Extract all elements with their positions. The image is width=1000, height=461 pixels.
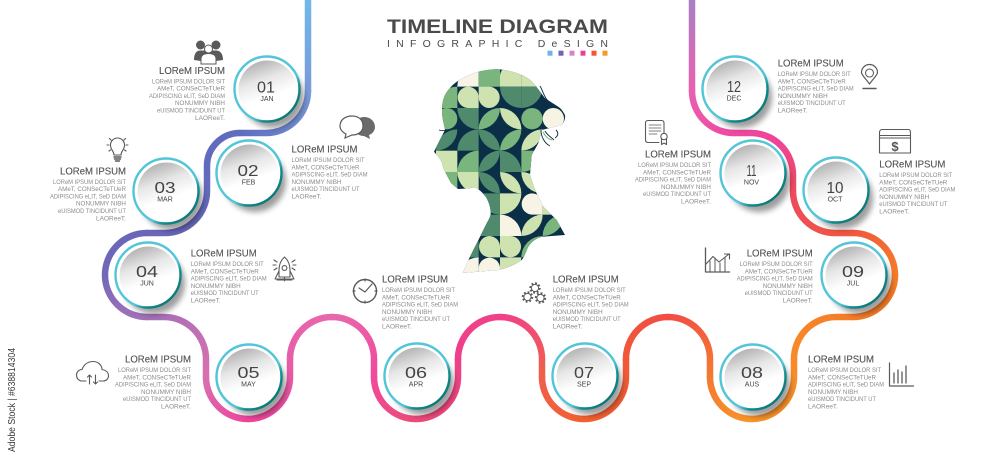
text block 08: AMeT, CONSeCTeTUeR xyxy=(808,374,876,381)
text block 04: eUISMOD TINCIDUNT UT xyxy=(191,290,259,297)
milestone 04: 04 xyxy=(136,264,158,281)
text block 10: eUISMOD TINCIDUNT UT xyxy=(879,201,947,208)
icon: growth chart xyxy=(706,248,730,272)
text block 08: LAOReeT. xyxy=(808,404,838,411)
milestone 12: DEC xyxy=(727,96,741,102)
text block 09: ADIPISCING eLIT, SeD DIAM xyxy=(737,276,813,283)
icon: gears xyxy=(523,283,545,303)
text block 05: NONUMMY NIBH xyxy=(141,389,191,396)
text block 03: eUISMOD TINCIDUNT UT xyxy=(58,208,126,215)
icon: location pin xyxy=(862,64,878,88)
milestone 12 xyxy=(702,56,772,128)
text block 06: eUISMOD TINCIDUNT UT xyxy=(382,316,450,323)
text block 10: ADIPISCING eLIT, SeD DIAM xyxy=(879,187,955,194)
text block 09 xyxy=(737,249,813,304)
text block 02: ADIPISCING eLIT, SeD DIAM xyxy=(292,172,368,179)
text block 05 xyxy=(115,355,191,410)
text block 07: ADIPISCING eLIT, SeD DIAM xyxy=(553,302,629,309)
icon: cloud xyxy=(76,362,108,384)
text block 01: LOReM IPSUM DOLOR SIT xyxy=(152,78,225,85)
text block 07: LOReM IPSUM xyxy=(553,275,619,286)
text block 12: ADIPISCING eLIT, SeD DIAM xyxy=(778,86,854,93)
subtitle: INFOGRAPHIC DeSIGN xyxy=(387,38,608,50)
milestone 05 xyxy=(216,344,286,416)
milestone 06 xyxy=(384,344,454,415)
text block 06: ADIPISCING eLIT, SeD DIAM xyxy=(382,302,458,309)
text block 01: NONUMMY NIBH xyxy=(175,100,225,107)
text block 05: LAOReeT. xyxy=(161,404,191,411)
milestone 06: APR xyxy=(409,382,423,388)
colour key squares xyxy=(548,51,608,56)
milestone 09: JUL xyxy=(847,280,859,288)
text block 07: NONUMMY NIBH xyxy=(553,309,603,316)
head silhouette with geometric pattern xyxy=(434,69,566,273)
milestone 01: 01 xyxy=(257,79,275,96)
milestone 08 xyxy=(720,344,790,416)
text block 12 xyxy=(778,59,854,114)
text block 03: AMeT, CONSeCTeTUeR xyxy=(58,186,126,193)
icon: banknotes with dollar xyxy=(880,130,910,154)
text block 08 xyxy=(808,355,884,410)
text block 07 xyxy=(553,275,629,330)
text block 11: LAOReeT. xyxy=(681,198,711,205)
text block 04 xyxy=(191,249,267,304)
text block 02 xyxy=(292,145,368,200)
milestone 09 xyxy=(822,242,891,314)
text block 10: LOReM IPSUM xyxy=(879,160,945,171)
text block 01 xyxy=(149,66,225,122)
text block 12: NONUMMY NIBH xyxy=(778,93,828,100)
text block 08: LOReM IPSUM xyxy=(808,355,874,366)
milestone 11: NOV xyxy=(744,180,759,186)
text block 08: eUISMOD TINCIDUNT UT xyxy=(808,396,876,403)
text block 06: AMeT, CONSeCTeTUeR xyxy=(382,294,450,301)
milestone 07: SEP xyxy=(577,382,591,388)
text block 08: LOReM IPSUM DOLOR SIT xyxy=(808,367,881,374)
text block 05: eUISMOD TINCIDUNT UT xyxy=(123,396,191,403)
text block 11: LOReM IPSUM DOLOR SIT xyxy=(638,162,711,169)
milestone 12: 12 xyxy=(727,79,741,96)
text block 04: LOReM IPSUM xyxy=(191,249,257,260)
milestone 07 xyxy=(552,344,622,415)
text block 03: LAOReeT. xyxy=(96,215,126,222)
text block 07: eUISMOD TINCIDUNT UT xyxy=(553,316,621,323)
text block 10: LAOReeT. xyxy=(879,208,909,215)
text block 12: LOReM IPSUM xyxy=(778,59,844,70)
milestone 08: AUS xyxy=(745,382,760,388)
text block 09: LAOReeT. xyxy=(783,298,813,305)
text block 12: AMeT, CONSeCTeTUeR xyxy=(778,78,846,85)
text block 03: NONUMMY NIBH xyxy=(76,201,126,208)
text block 03 xyxy=(50,166,126,222)
milestone 03: 03 xyxy=(154,180,176,197)
timeline path xyxy=(105,0,895,419)
text block 01: LOReM IPSUM xyxy=(159,66,225,77)
icon: certificate xyxy=(646,120,667,144)
icon: clock xyxy=(353,279,377,303)
milestone 07: 07 xyxy=(574,365,594,382)
text block 01: ADIPISCING eLIT, SeD DIAM xyxy=(149,93,225,100)
text block 05: LOReM IPSUM DOLOR SIT xyxy=(118,367,191,374)
text block 11: AMeT, CONSeCTeTUeR xyxy=(643,169,711,176)
text block 02: LOReM IPSUM DOLOR SIT xyxy=(292,157,365,164)
milestone 11 xyxy=(720,140,790,212)
icon: people xyxy=(194,40,223,64)
text block 09: AMeT, CONSeCTeTUeR xyxy=(745,268,813,275)
milestone 05: 05 xyxy=(238,365,260,382)
milestone 03: MAR xyxy=(157,196,173,204)
text block 12: eUISMOD TINCIDUNT UT xyxy=(778,100,846,107)
milestone 04: JUN xyxy=(140,280,154,288)
milestone 05: MAY xyxy=(241,382,256,388)
text block 08: ADIPISCING eLIT, SeD DIAM xyxy=(808,382,884,389)
text block 11: LOReM IPSUM xyxy=(645,150,711,161)
text block 12: LOReM IPSUM DOLOR SIT xyxy=(778,71,851,78)
title: TIMELINE DIAGRAM xyxy=(387,16,608,38)
milestone 02: FEB xyxy=(242,180,256,186)
text block 05: ADIPISCING eLIT, SeD DIAM xyxy=(115,382,191,389)
text block 04: LAOReeT. xyxy=(191,298,221,305)
milestone 09: 09 xyxy=(842,264,864,281)
milestone 01 xyxy=(234,56,304,128)
text block 10: LOReM IPSUM DOLOR SIT xyxy=(879,172,952,179)
text block 10: NONUMMY NIBH xyxy=(879,194,930,201)
text block 02: LAOReeT. xyxy=(292,193,322,200)
text block 09: LOReM IPSUM DOLOR SIT xyxy=(740,261,813,268)
text block 06: LOReM IPSUM xyxy=(382,275,448,286)
text block 09: NONUMMY NIBH xyxy=(763,283,813,290)
icon: speech bubbles xyxy=(340,116,375,139)
milestone 08: 08 xyxy=(741,365,763,382)
text block 10 xyxy=(879,160,955,216)
milestone 02 xyxy=(216,140,286,212)
text block 01: eUISMOD TINCIDUNT UT xyxy=(157,108,225,114)
source credit: Adobe Stock | #638814304 xyxy=(7,348,18,452)
text block 04: NONUMMY NIBH xyxy=(191,283,241,290)
text block 05: AMeT, CONSeCTeTUeR xyxy=(123,374,191,381)
text block 11: eUISMOD TINCIDUNT UT xyxy=(643,191,711,198)
milestone 10: 10 xyxy=(826,180,844,197)
text block 03: LOReM IPSUM xyxy=(60,166,126,178)
text block 07: LOReM IPSUM DOLOR SIT xyxy=(553,287,626,294)
text block 02: LOReM IPSUM xyxy=(292,145,358,156)
text block 04: ADIPISCING eLIT, SeD DIAM xyxy=(191,276,267,283)
text block 02: NONUMMY NIBH xyxy=(292,179,342,186)
text block 11: ADIPISCING eLIT, SeD DIAM xyxy=(635,177,711,184)
text block 03: LOReM IPSUM DOLOR SIT xyxy=(53,179,126,186)
milestone 11: 11 xyxy=(746,163,756,180)
milestone 03 xyxy=(134,158,203,230)
icon: rocket xyxy=(273,257,296,281)
icon: bar chart xyxy=(890,363,914,386)
text block 07: AMeT, CONSeCTeTUeR xyxy=(553,294,621,301)
milestone 02: 02 xyxy=(238,163,258,180)
text block 11: NONUMMY NIBH xyxy=(661,184,711,191)
text block 03: ADIPISCING eLIT, SeD DIAM xyxy=(50,193,126,200)
text block 10: AMeT, CONSeCTeTUeR xyxy=(879,179,948,186)
text block 06: NONUMMY NIBH xyxy=(382,309,432,316)
text block 12: LAOReeT. xyxy=(778,107,808,114)
text block 04: LOReM IPSUM DOLOR SIT xyxy=(191,261,264,268)
text block 02: AMeT, CONSeCTeTUeR xyxy=(292,164,360,171)
icon: light bulb xyxy=(107,138,128,161)
text block 08: NONUMMY NIBH xyxy=(808,389,858,396)
text block 05: LOReM IPSUM xyxy=(125,355,191,366)
milestone 06: 06 xyxy=(405,365,427,382)
text block 06: LOReM IPSUM DOLOR SIT xyxy=(382,287,455,294)
text block 06: LAOReeT. xyxy=(382,324,412,331)
milestone 04 xyxy=(116,242,185,314)
text block 01: LAOReeT. xyxy=(195,115,225,122)
text block 09: LOReM IPSUM xyxy=(747,249,813,260)
text block 11 xyxy=(635,150,711,206)
milestone 01: JAN xyxy=(260,96,274,103)
text block 07: LAOReeT. xyxy=(553,324,583,331)
text block 02: eUISMOD TINCIDUNT UT xyxy=(292,186,360,193)
milestone 10: OCT xyxy=(828,196,843,204)
icon: banknotes with dollar: $ xyxy=(891,139,899,154)
text block 09: eUISMOD TINCIDUNT UT xyxy=(745,290,813,297)
text block 06 xyxy=(382,275,458,330)
milestone 10 xyxy=(804,158,873,229)
text block 01: AMeT, CONSeCTeTUeR xyxy=(157,86,225,93)
text block 04: AMeT, CONSeCTeTUeR xyxy=(191,268,259,275)
